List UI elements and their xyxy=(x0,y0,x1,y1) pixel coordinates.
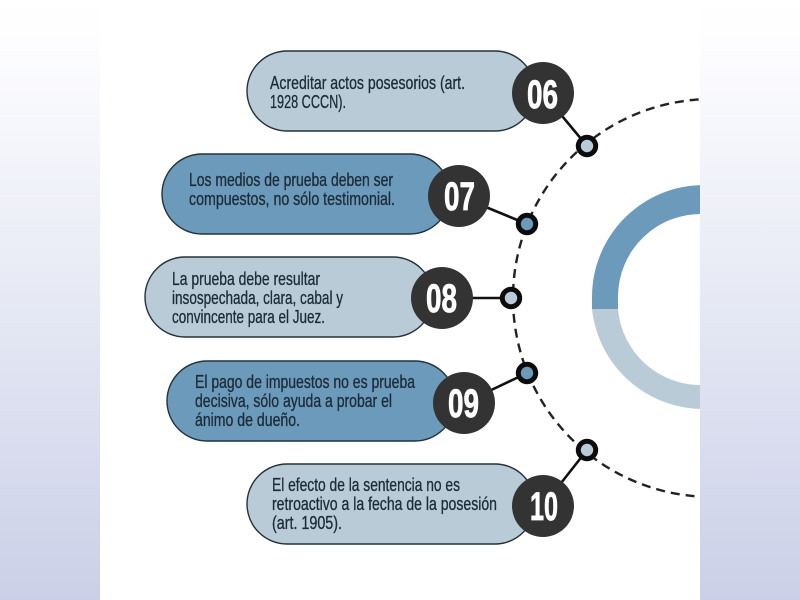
item 06 xyxy=(247,51,596,155)
item 09: ánimo de dueño. xyxy=(195,410,300,430)
item 09: 09 xyxy=(448,382,479,426)
item 07: 07 xyxy=(444,175,475,219)
item 06: 1928 CCCN). xyxy=(270,92,346,112)
item 08: 08 xyxy=(426,277,457,321)
item 10: 10 xyxy=(530,485,558,529)
item 10: retroactivo a la fecha de la posesión xyxy=(272,494,497,514)
item 09: El pago de impuestos no es prueba xyxy=(195,372,416,392)
item 09 xyxy=(167,361,536,441)
item 09: decisiva, sólo ayuda a probar el xyxy=(195,391,392,411)
white central panel xyxy=(100,0,700,600)
item 07 xyxy=(162,154,536,234)
item 07: compuestos, no sólo testimonial. xyxy=(189,189,395,209)
item 10: El efecto de la sentencia no es xyxy=(272,475,460,495)
item 06: Acreditar actos posesorios (art. xyxy=(270,73,465,93)
item 08: insospechada, clara, cabal y xyxy=(172,288,343,308)
item 07: Los medios de prueba deben ser xyxy=(189,170,393,190)
item 08: La prueba debe resultar xyxy=(172,269,320,289)
item 08: convincente para el Juez. xyxy=(172,307,325,327)
item 10 xyxy=(247,441,596,544)
item 06: 06 xyxy=(527,73,558,117)
item 10: (art. 1905). xyxy=(272,513,342,533)
item 08 xyxy=(145,257,520,337)
dashed orbit circle xyxy=(512,98,699,498)
central ring xyxy=(592,185,704,409)
